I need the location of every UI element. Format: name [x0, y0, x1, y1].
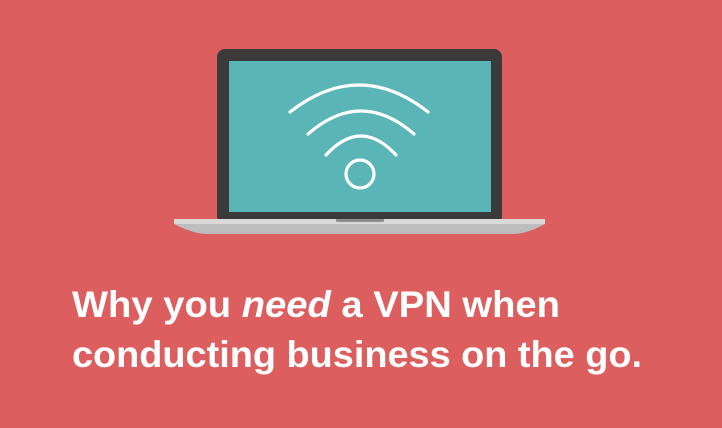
title: [72, 284, 642, 375]
title: Why you need a VPN when: [72, 284, 560, 325]
laptop: [174, 49, 545, 234]
title: conducting business on the go.: [72, 334, 642, 375]
laptop base: [174, 219, 545, 234]
laptop bezel: [217, 49, 502, 224]
icon: wifi: [290, 85, 428, 188]
laptop screen: [229, 61, 491, 212]
